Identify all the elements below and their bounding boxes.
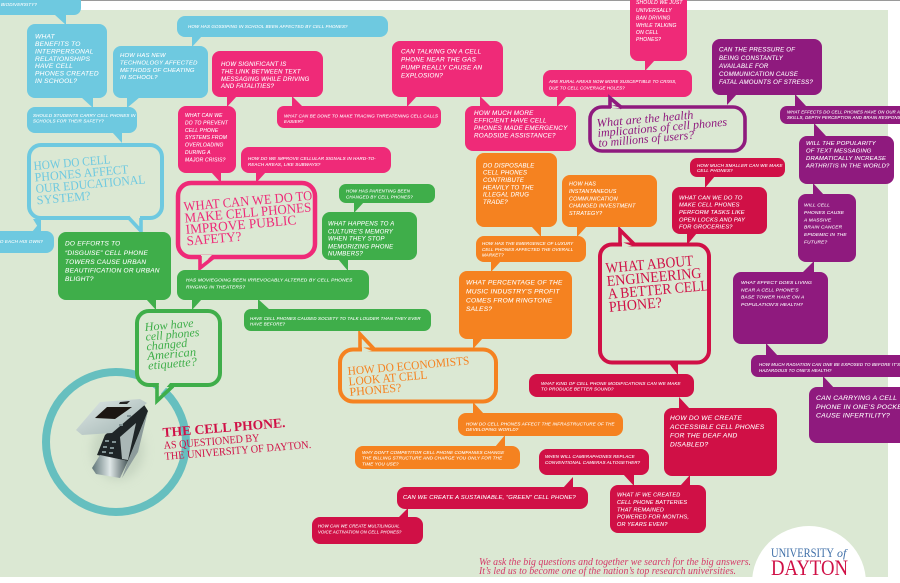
- bubble: parenting: HOW HAS PARENTING BEEN: [346, 189, 411, 194]
- bubble: locks and groceries: OPEN LOCKS AND PAY: [679, 217, 746, 223]
- bubble: stress: [712, 39, 822, 106]
- footer tagline: We ask the big questions and together we search for the big answers.: [479, 557, 751, 568]
- panel: economics questions (orange): [340, 153, 657, 469]
- heading bubble: health implications: What are the health: [596, 108, 694, 130]
- bubble: luxury phones: CELL PHONES AFFECTED THE OVERALL: [482, 247, 574, 252]
- bubble: drug trade: CELL PHONES: [483, 171, 527, 177]
- bubble: gossiping: [177, 16, 388, 47]
- bubble: stress: COMMUNICATION CAUSE: [719, 71, 799, 78]
- bubble: motor skills: [780, 106, 900, 136]
- heading bubble: educational system: [29, 145, 162, 232]
- bubble: prevent overloading: [178, 106, 236, 183]
- bubble: arthritis: OF TEXT MESSAGING: [806, 149, 872, 155]
- panel: etiquette questions (green): [58, 184, 435, 401]
- bubble: ban driving: UNIVERSALLY: [636, 8, 672, 14]
- bubble: investment strategy: STRATEGY?: [569, 211, 602, 217]
- bubble: tracing calls: EASIER?: [284, 119, 304, 124]
- bubble: prevent overloading: WHAT CAN WE: [185, 113, 223, 119]
- bubble: talking louder: HAVE BEFORE?: [250, 321, 286, 326]
- bubble: smaller phones: [690, 158, 785, 188]
- bubble: to each his own: [0, 221, 54, 253]
- bubble: safety: [27, 107, 137, 143]
- bubble: text messaging and driving: [212, 51, 323, 107]
- bubble: drug trade: TRADE?: [483, 200, 508, 206]
- bubble: better sound: TO PRODUCE BETTER SOUND?: [541, 387, 614, 392]
- bubble: text messaging and driving: HOW SIGNIFICANT IS: [221, 62, 286, 68]
- bubble: ban driving: BAN DRIVING: [636, 16, 670, 22]
- bubble: infrastructure: HOW DO CELL PHONES AFFECT THE INFRASTRUCTURE OF THE: [466, 421, 616, 426]
- heading bubble: public safety: WHAT CAN WE DO TO: [183, 188, 313, 214]
- bubble: luxury phones: HOW HAS THE EMERGENCE OF LUXURY: [482, 241, 574, 246]
- heading bubble: American etiquette: cell phones: [145, 325, 200, 344]
- bubble: biodiversity: BIODIVERSITY?: [1, 2, 37, 7]
- bubble: locks and groceries: PERFORM TASKS LIKE: [679, 210, 745, 216]
- bubble: brain cancer: WILL CELL: [804, 203, 830, 209]
- bubble: cheating: METHODS OF CHEATING: [120, 68, 195, 74]
- bubble: deaf and disabled: DISABLED?: [670, 442, 708, 449]
- bubble: roadside assistance: ROADSIDE ASSISTANCE?: [474, 133, 556, 140]
- bubble: batteries: WHAT IF WE CREATED: [617, 493, 680, 499]
- heading bubble: American etiquette: How have: [143, 316, 195, 334]
- heading bubble: American etiquette: [137, 311, 220, 401]
- bubble: ban driving: SHOULD WE JUST: [636, 0, 683, 6]
- heading bubble: educational system: PHONES AFFECT: [34, 162, 129, 184]
- bubble: radiation: HAZARDOUS TO ONE’S HEALTH?: [759, 368, 832, 373]
- bubble: safety: SCHOOLS FOR THEIR SAFETY?: [33, 118, 104, 124]
- bubble: interpersonal relationships: IN SCHOOL?: [35, 78, 77, 85]
- bubble: billing structure: WHY DON’T COMPETITOR CELL PHONE COMPANIES CHANGE: [362, 450, 505, 455]
- bubble: prevent overloading: OVERLOADING: [185, 142, 224, 148]
- bubble: radiation: HOW MUCH RADIATION CAN ONE BE EXPOSED TO BEFORE IT’S: [759, 362, 900, 367]
- bubble: stress: BEING CONSTANTLY: [719, 55, 784, 62]
- title: AS QUESTIONED BY: [163, 432, 260, 452]
- bubble: arthritis: ARTHRITIS IN THE WORLD?: [805, 163, 890, 169]
- bubble: radiation: [751, 355, 900, 389]
- bubble: cameraphones: [539, 449, 649, 486]
- heading bubble: better cell phone: ENGINEERING: [606, 266, 702, 290]
- bubble: drug trade: CONTRIBUTE: [483, 178, 525, 184]
- bubble: urban blight: DO EFFORTS TO: [65, 241, 120, 248]
- bubble: interpersonal relationships: PHONES CREATED: [35, 70, 99, 78]
- heading bubble: public safety: MAKE CELL PHONES: [184, 199, 312, 225]
- bubble: infertility: [809, 387, 900, 443]
- bubble: base tower: WHAT EFFECT DOES LIVING: [741, 280, 812, 286]
- bubble: multilingual: [312, 517, 423, 544]
- bubble: luxury phones: MARKET?: [482, 252, 504, 257]
- bubble: biodiversity: [0, 0, 81, 25]
- bubble: ringtone sales: COMES FROM RINGTONE: [466, 297, 553, 304]
- bubble: infrastructure: DEVELOPING WORLD?: [466, 427, 519, 432]
- bubble: prevent overloading: MAJOR CRISIS?: [185, 158, 226, 164]
- bubble: talking louder: HAVE CELL PHONES CAUSED SOCIETY TO TALK LOUDER THAN THEY EVER: [250, 316, 421, 321]
- bubble: culture's memory: CULTURE’S MEMORY: [328, 229, 394, 235]
- logo: University of Dayton: of: [837, 546, 848, 560]
- bubble: interpersonal relationships: WHAT: [35, 34, 56, 40]
- bubble: investment strategy: INSTANTANEOUS: [569, 189, 617, 195]
- bubble: gas pump: CAN TALKING ON A CELL: [401, 48, 482, 56]
- bubble: text messaging and driving: THE LINK BETWEEN TEXT: [221, 70, 302, 76]
- bubble: safety: SHOULD STUDENTS CARRY CELL PHONES IN: [33, 113, 136, 118]
- heading bubble: American etiquette: American: [146, 345, 197, 363]
- bubble: interpersonal relationships: BENEFITS TO: [35, 41, 81, 48]
- bubble: cheating: IN SCHOOL?: [120, 75, 158, 81]
- title: [162, 413, 312, 463]
- bubble: investment strategy: [562, 175, 657, 237]
- footer tagline: It’s led us to become one of the nation’s top research universities.: [478, 566, 736, 577]
- bubble: locks and groceries: MAKE CELL PHONES: [679, 203, 740, 209]
- bubble: tracing calls: [277, 106, 441, 128]
- bubble: urban blight: TOWERS CAUSE URBAN: [65, 259, 146, 266]
- bubble: interpersonal relationships: HAVE CELL: [35, 63, 73, 70]
- bubble: talking louder: [244, 309, 431, 331]
- bubble: deaf and disabled: HOW DO WE CREATE: [670, 415, 742, 422]
- bubble: prevent overloading: DURING A: [185, 150, 211, 156]
- title: THE UNIVERSITY OF DAYTON.: [164, 439, 312, 463]
- bubble: parenting: [339, 184, 435, 213]
- bubble: infrastructure: [458, 413, 623, 447]
- bubble: interpersonal relationships: [27, 24, 107, 108]
- bubble: multilingual: HOW CAN WE CREATE MULTILINGUAL: [318, 523, 400, 528]
- panel: public safety questions (pink): [178, 0, 692, 268]
- bubble: batteries: THAT REMAINED: [617, 507, 664, 513]
- bubble: cameraphones: CONVENTIONAL CAMERAS ALTOGETHER?: [545, 460, 641, 465]
- bubble: batteries: POWERED FOR MONTHS,: [617, 515, 689, 521]
- bubble: text messaging and driving: MESSAGING WHILE DRIVING: [221, 77, 310, 83]
- bubble: brain cancer: A MASSIVE: [803, 217, 832, 223]
- heading bubble: economists: [340, 334, 496, 414]
- bubble: billing structure: [355, 446, 520, 469]
- heading bubble: health implications: to millions of users?: [598, 128, 695, 150]
- bubble: interpersonal relationships: RELATIONSHIPS: [35, 56, 91, 63]
- bubble: gas pump: [392, 41, 503, 107]
- bubble: drug trade: HEAVILY TO THE: [483, 185, 535, 191]
- bubble: base tower: BASE TOWER HAVE ON A: [741, 295, 804, 301]
- bubble: gas pump: PUMP REALLY CAUSE AN: [401, 64, 483, 72]
- bubble: deaf and disabled: FOR THE DEAF AND: [670, 433, 737, 440]
- bubble: roadside assistance: PHONES MADE EMERGENCY: [474, 125, 568, 132]
- heading bubble: health implications: [590, 98, 745, 151]
- bubble: ringtone sales: [459, 271, 572, 349]
- bubble: billing structure: TIME YOU USE?: [362, 461, 399, 466]
- bubble: roadside assistance: HOW MUCH MORE: [474, 110, 534, 117]
- bubble: batteries: [610, 485, 706, 533]
- bubble: prevent overloading: DO TO PREVENT: [185, 120, 229, 126]
- bubble: green cell phone: [397, 477, 588, 519]
- bubble: moviegoing: RINGING IN THEATERS?: [186, 284, 245, 290]
- bubble: brain cancer: PHONES CAUSE: [804, 210, 845, 216]
- heading bubble: public safety: IMPROVE PUBLIC: [185, 212, 297, 237]
- bubble: urban blight: “DISGUISE” CELL PHONE: [65, 250, 148, 257]
- bubble: urban blight: [58, 232, 171, 310]
- bubble: locks and groceries: WHAT CAN WE DO TO: [679, 195, 743, 201]
- bubble: batteries: CELL PHONE BATTERIES: [617, 500, 687, 506]
- bubble: culture's memory: NUMBERS?: [328, 252, 363, 258]
- bubble: roadside assistance: EFFICIENT HAVE CELL: [474, 118, 547, 125]
- bubble: culture's memory: WHAT HAPPENS TO A: [328, 222, 394, 228]
- bubble: rural areas: [543, 70, 692, 107]
- bubble: gas pump: PHONE NEAR THE GAS: [401, 56, 477, 64]
- bubble: stress: FATAL AMOUNTS OF STRESS?: [719, 79, 813, 86]
- bubble: infertility: CAUSE INFERTILITY?: [816, 413, 890, 420]
- heading bubble: educational system: OUR EDUCATIONAL: [35, 172, 146, 196]
- bubble: rural areas: ARE RURAL AREAS NOW MORE SUSCEPTIBLE TO CRISIS,: [548, 79, 677, 84]
- bubble: investment strategy: HOW HAS: [569, 182, 596, 188]
- bubble: ringtone sales: WHAT PERCENTAGE OF THE: [466, 280, 563, 287]
- heading bubble: economists: HOW DO ECONOMISTS: [347, 353, 470, 378]
- bubble: roadside assistance: [465, 106, 576, 151]
- bubble: better sound: [529, 374, 694, 409]
- bubble: cameraphones: WHEN WILL CAMERAPHONES REPLACE: [545, 454, 635, 459]
- bubble: tracing calls: WHAT CAN BE DONE TO MAKE TRACING THREATENING CELL CALLS: [284, 114, 438, 118]
- bubble: ban driving: WHILE TALKING: [636, 23, 677, 29]
- icon: flip phone: [76, 399, 148, 480]
- bubble: locks and groceries: FOR GROCERIES?: [679, 225, 733, 231]
- logo: University of Dayton: UNIVERSITY: [771, 546, 834, 560]
- bubble: investment strategy: CHANGED INVESTMENT: [569, 204, 636, 210]
- heading bubble: better cell phone: PHONE?: [608, 295, 663, 316]
- panel: engineering questions (red): [312, 158, 785, 544]
- bubble: ringtone sales: SALES?: [466, 306, 492, 313]
- bubble: culture's memory: WHEN THEY STOP: [328, 237, 385, 243]
- bubble: drug trade: ILLEGAL DRUG: [483, 193, 529, 199]
- heading bubble: American etiquette: changed: [146, 336, 189, 353]
- bubble: cellular signals: HOW DO WE IMPROVE CELLULAR SIGNALS IN HARD-TO-: [248, 156, 376, 161]
- bubble: base tower: [733, 272, 828, 356]
- bubble: better sound: WHAT KIND OF CELL PHONE MODIFICATIONS CAN WE MAKE: [541, 381, 681, 386]
- bubble: culture's memory: MEMORIZING PHONE: [328, 244, 394, 250]
- bubble: deaf and disabled: ACCESSIBLE CELL PHONES: [669, 424, 765, 431]
- heading bubble: educational system: SYSTEM?: [36, 189, 91, 207]
- bubble: green cell phone: CAN WE CREATE A SUSTAINABLE, “GREEN” CELL PHONE?: [403, 495, 577, 501]
- heading bubble: educational system: HOW DO CELL: [33, 152, 111, 173]
- bubble: luxury phones: [476, 236, 586, 272]
- bubble: arthritis: DRAMATICALLY INCREASE: [806, 156, 886, 162]
- bubble: arthritis: [799, 136, 894, 195]
- bubble: prevent overloading: CELL PHONE: [185, 128, 219, 134]
- bubble: text messaging and driving: AND FATALITIES?: [220, 84, 275, 90]
- bubble: infertility: CAN CARRYING A CELL: [816, 395, 897, 402]
- bubble: smaller phones: HOW MUCH SMALLER CAN WE MAKE: [697, 163, 784, 168]
- bubble: brain cancer: [798, 194, 856, 273]
- heading bubble: public safety: [178, 183, 316, 268]
- bubble: ban driving: ON CELL: [636, 30, 659, 36]
- bubble: interpersonal relationships: INTERPERSONAL: [35, 48, 94, 56]
- bubble: arthritis: WILL THE POPULARITY: [806, 141, 877, 147]
- bubble: cheating: HOW HAS NEW: [120, 53, 167, 59]
- bubble: stress: AVAILABLE FOR: [718, 63, 769, 70]
- bubble: billing structure: THE BILLING STRUCTURE AND CHARGE YOU ONLY FOR THE: [362, 456, 503, 461]
- panel: education questions (cyan): [0, 0, 388, 253]
- bubble: moviegoing: HAS MOVIEGOING BEEN IRREVOCABLY ALTERED BY CELL PHONES: [186, 278, 353, 284]
- heading bubble: public safety: SAFETY?: [186, 229, 242, 248]
- title: THE CELL PHONE.: [162, 415, 286, 440]
- bubble: ringtone sales: MUSIC INDUSTRY’S PROFIT: [466, 289, 560, 296]
- bubble: brain cancer: FUTURE?: [804, 239, 827, 245]
- bubble: brain cancer: BRAIN CANCER: [804, 225, 843, 231]
- bubble: cellular signals: REACH AREAS, LIKE SUBWAYS?: [248, 162, 321, 167]
- bubble: culture's memory: [322, 212, 417, 271]
- heading bubble: economists: LOOK AT CELL: [348, 368, 428, 388]
- bubble: parenting: CHANGED BY CELL PHONES?: [346, 195, 413, 200]
- heading bubble: health implications: implications of cell phones: [597, 115, 728, 140]
- bubble: rural areas: DUE TO CELL COVERAGE HOLES?: [549, 86, 625, 90]
- teal circle: [46, 372, 186, 512]
- logo: University of Dayton: DAYTON: [771, 555, 848, 580]
- logo: University of Dayton: [752, 526, 866, 583]
- bubble: urban blight: BLIGHT?: [65, 276, 94, 283]
- heading bubble: better cell phone: [600, 230, 710, 375]
- heading bubble: American etiquette: etiquette?: [147, 354, 197, 373]
- bubble: investment strategy: COMMUNICATION: [569, 196, 618, 202]
- bubble: deaf and disabled: [664, 408, 777, 486]
- heading bubble: better cell phone: A BETTER CELL: [607, 278, 709, 303]
- bubble: base tower: NEAR A CELL PHONE’S: [741, 287, 799, 293]
- heading bubble: better cell phone: WHAT ABOUT: [605, 253, 694, 277]
- bubble: gossiping: HOW HAS GOSSIPING IN SCHOOL BEEN AFFECTED BY CELL PHONES?: [188, 24, 348, 29]
- bubble: locks and groceries: [672, 187, 767, 245]
- panel: health questions (purple): [590, 39, 900, 443]
- heading bubble: economists: PHONES?: [349, 380, 402, 399]
- bubble: brain cancer: EPIDEMIC IN THE: [804, 232, 847, 238]
- bubble: drug trade: DO DISPOSABLE: [483, 163, 535, 169]
- bubble: batteries: OR YEARS EVEN?: [617, 522, 668, 528]
- bubble: prevent overloading: SYSTEMS FROM: [185, 135, 228, 141]
- bubble: cheating: [113, 46, 208, 108]
- bubble: ban driving: [630, 0, 687, 71]
- bubble: moviegoing: [177, 270, 369, 310]
- bubble: multilingual: VOICE ACTIVATION ON CELL PHONES?: [318, 529, 402, 534]
- bubble: ban driving: PHONES?: [636, 37, 661, 43]
- bubble: drug trade: [476, 153, 557, 237]
- bubble: urban blight: BEAUTIFICATION OR URBAN: [65, 268, 160, 275]
- bubble: smaller phones: CELL PHONES?: [697, 168, 733, 173]
- bubble: cheating: TECHNOLOGY AFFECTED: [120, 60, 198, 66]
- bubble: gas pump: EXPLOSION?: [401, 72, 443, 80]
- bubble: base tower: POPULATION’S HEALTH?: [741, 302, 803, 308]
- bubble: stress: CAN THE PRESSURE OF: [719, 47, 796, 54]
- bubble: cellular signals: [241, 147, 391, 183]
